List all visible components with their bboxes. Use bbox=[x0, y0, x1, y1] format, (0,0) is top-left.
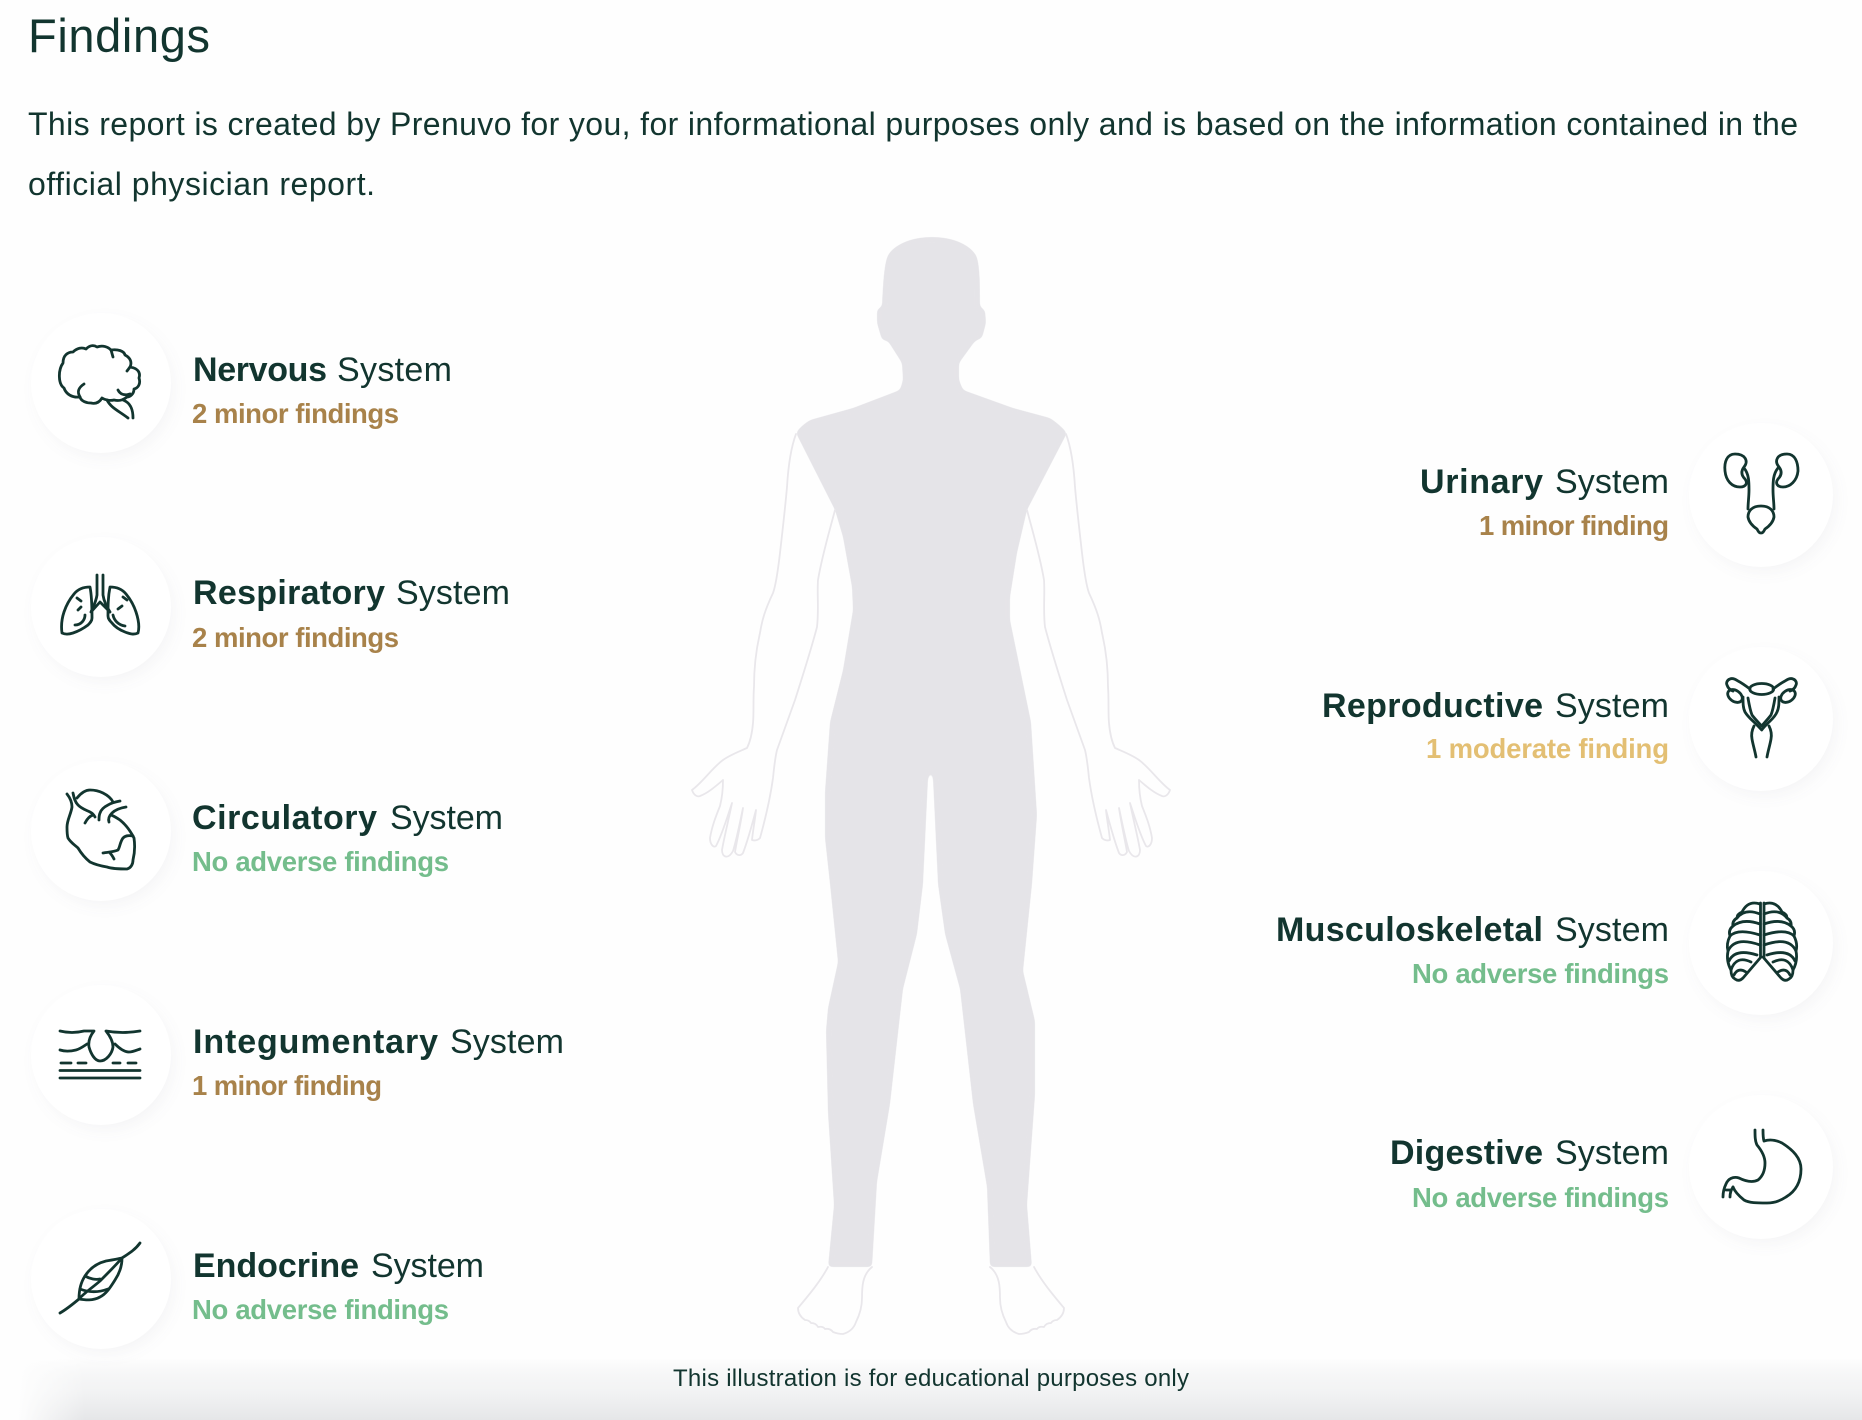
panel: endocrine system bbox=[31, 1209, 484, 1349]
panel: integumentary system bbox=[31, 985, 564, 1125]
heading bbox=[1420, 463, 1669, 501]
panel: digestive system bbox=[1390, 1095, 1833, 1239]
heading: System bbox=[371, 1247, 484, 1285]
heading bbox=[193, 1247, 484, 1285]
panel: musculoskeletal system bbox=[1276, 871, 1833, 1015]
heading: Respiratory bbox=[193, 574, 385, 612]
body silhouette bbox=[796, 237, 1067, 1267]
panel: urinary system bbox=[1420, 423, 1833, 567]
heading: System bbox=[450, 1023, 564, 1061]
panel: circulatory system bbox=[31, 761, 503, 901]
intro paragraph: This report is created by Prenuvo for you, for informational purposes only and is based on the information contained in the bbox=[28, 106, 1798, 142]
icon: skin layers bbox=[60, 1031, 140, 1078]
heading bbox=[1322, 687, 1669, 725]
left foot outline bbox=[798, 1267, 872, 1334]
heading bbox=[193, 574, 510, 612]
panel: nervous system bbox=[31, 313, 452, 453]
heading: Digestive bbox=[1390, 1134, 1543, 1172]
intro paragraph: official physician report. bbox=[28, 166, 375, 202]
right foot outline bbox=[990, 1267, 1064, 1334]
panel: respiratory system bbox=[31, 537, 510, 677]
heading: Reproductive bbox=[1322, 687, 1543, 725]
icon: leaf bbox=[60, 1243, 140, 1313]
status: No adverse findings bbox=[192, 846, 449, 877]
icon: uterus bbox=[1725, 679, 1798, 757]
heading: System bbox=[390, 799, 503, 837]
heading: System bbox=[1555, 687, 1669, 725]
illustration caption: This illustration is for educational purposes only bbox=[673, 1365, 1189, 1392]
status: No adverse findings bbox=[1412, 958, 1669, 989]
icon: stomach bbox=[1723, 1130, 1801, 1203]
intro paragraph bbox=[28, 106, 1798, 202]
heading: System bbox=[1555, 911, 1669, 949]
panel: reproductive system bbox=[1322, 647, 1833, 791]
heading: System bbox=[337, 351, 452, 389]
status: No adverse findings bbox=[192, 1294, 449, 1325]
heading: System bbox=[396, 574, 510, 612]
status: 1 moderate finding bbox=[1426, 733, 1669, 764]
status: 1 minor finding bbox=[1479, 510, 1669, 541]
heading: System bbox=[1555, 1134, 1669, 1172]
title: Findings bbox=[28, 9, 210, 62]
heading: Musculoskeletal bbox=[1276, 911, 1543, 949]
heading bbox=[193, 351, 452, 389]
heading: Circulatory bbox=[192, 799, 377, 837]
heading bbox=[1390, 1134, 1669, 1172]
body illustration bbox=[692, 237, 1170, 1334]
heading: Integumentary bbox=[193, 1023, 438, 1061]
heading: System bbox=[1555, 463, 1669, 501]
status: No adverse findings bbox=[1412, 1182, 1669, 1213]
heading bbox=[193, 1023, 564, 1061]
status: 2 minor findings bbox=[192, 398, 399, 429]
icon: urinary tract bbox=[1725, 454, 1798, 533]
icon: rib cage bbox=[1727, 903, 1797, 980]
heading bbox=[1276, 911, 1669, 949]
status: 2 minor findings bbox=[192, 622, 399, 653]
heading: Nervous bbox=[193, 351, 327, 389]
heading bbox=[192, 799, 503, 837]
icon: brain bbox=[59, 346, 140, 418]
icon: lungs bbox=[62, 575, 139, 634]
left arm outline bbox=[692, 434, 835, 857]
right arm outline bbox=[1027, 434, 1170, 857]
heading: Urinary bbox=[1420, 463, 1543, 501]
icon: heart bbox=[67, 790, 135, 869]
status: 1 minor finding bbox=[192, 1070, 382, 1101]
heading: Endocrine bbox=[193, 1247, 359, 1285]
